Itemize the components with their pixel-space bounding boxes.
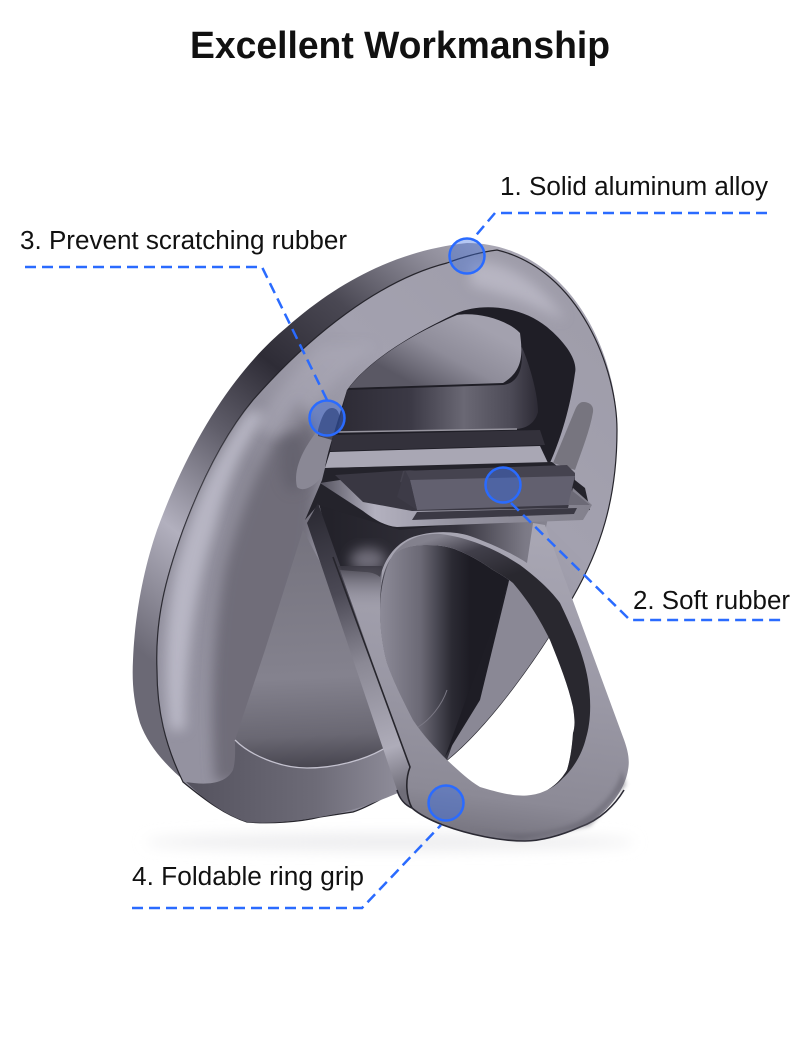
space under platform — [305, 462, 590, 530]
callout 4: foldable ring grip — [132, 786, 464, 908]
ring dividing line — [333, 557, 412, 808]
ring upper fade — [338, 566, 382, 612]
title: Excellent Workmanship — [190, 25, 610, 67]
recess with lit wedge — [235, 530, 385, 768]
light platform strip — [325, 446, 548, 468]
callout 3: prevent scratching rubber: 3. Prevent scratching rubber — [20, 227, 348, 255]
plate slot — [412, 508, 577, 520]
rubber block — [397, 465, 575, 510]
callout 1: solid aluminum alloy — [450, 173, 768, 274]
view through ring hole — [380, 545, 548, 760]
face shading — [166, 262, 565, 783]
disc rim — [133, 243, 617, 823]
callout 2: soft rubber: 2. Soft rubber — [633, 587, 791, 615]
callout 3: prevent scratching rubber — [20, 227, 348, 436]
lower face band — [186, 740, 405, 823]
inner recess shelf — [337, 345, 538, 432]
callout 2: soft rubber — [486, 468, 791, 620]
dark strip — [330, 430, 545, 451]
lit highlight above ring — [350, 548, 386, 572]
disc face — [157, 250, 617, 823]
right rubber pad — [553, 402, 593, 470]
base plate lip — [320, 480, 592, 527]
callout 4: foldable ring grip: 4. Foldable ring grip — [132, 863, 364, 891]
ring stem — [307, 503, 420, 812]
ground shadow — [145, 834, 635, 850]
product: magnetic ring holder — [133, 243, 629, 841]
left rubber pad — [280, 408, 340, 492]
recess arc highlight — [235, 740, 385, 768]
ring inner bevel — [380, 534, 590, 793]
ring underside edge — [397, 790, 624, 841]
callout 1: solid aluminum alloy: 1. Solid aluminum alloy — [500, 173, 768, 201]
ring lower shading — [460, 770, 626, 840]
base plate top — [335, 470, 573, 511]
top opening — [325, 307, 575, 470]
inner sloped surface — [349, 314, 521, 388]
ring body — [340, 523, 629, 841]
right plate top — [568, 489, 590, 505]
dark area behind ring — [317, 495, 548, 760]
thin light line — [337, 429, 517, 432]
